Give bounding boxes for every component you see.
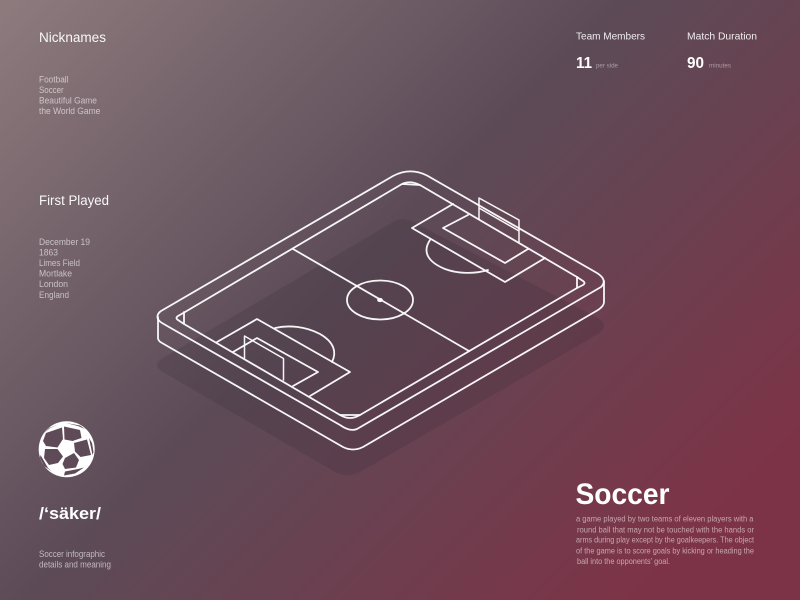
top goal area	[443, 215, 528, 263]
bottom goal area	[233, 338, 318, 386]
first played details: 1863	[39, 248, 58, 258]
stat: team members: per side	[596, 64, 619, 70]
caption: Soccer infographic	[39, 549, 105, 559]
caption	[39, 549, 111, 570]
bottom penalty box	[217, 319, 350, 396]
first played details: London	[39, 279, 68, 289]
stat: match duration: 90	[687, 55, 704, 72]
pitch outer rim	[157, 171, 604, 430]
centre circle	[347, 280, 413, 320]
top goal	[479, 198, 519, 242]
first played details: England	[39, 290, 69, 300]
bottom goal	[244, 336, 284, 380]
stat: match duration: Match Duration	[687, 30, 757, 42]
description: round ball that may not be touched with the hands or	[577, 525, 754, 534]
nicknames heading: Nicknames	[39, 30, 106, 45]
bottom penalty arc	[275, 326, 334, 362]
stat: match duration	[687, 30, 757, 72]
centre spot	[378, 299, 382, 301]
description: arms during play except by the goalkeepers. The object	[576, 536, 755, 545]
first played block	[39, 193, 109, 300]
top penalty box	[412, 204, 545, 282]
pitch shadow	[157, 219, 604, 475]
nicknames list	[39, 74, 100, 116]
description: a game played by two teams of eleven players with a	[576, 515, 754, 524]
stat: team members: 11	[576, 55, 592, 72]
description: ball into the opponents' goal.	[577, 557, 670, 566]
nicknames list: Beautiful Game	[39, 95, 97, 105]
stat: team members: Team Members	[576, 30, 645, 42]
isometric soccer pitch	[157, 171, 604, 450]
nicknames list: Football	[39, 74, 68, 84]
description	[576, 515, 755, 566]
description: of the game is to score goals by kicking or heading the	[576, 546, 755, 555]
nicknames list: Soccer	[39, 85, 64, 95]
corner arcs	[184, 184, 577, 415]
stat: match duration: minutes	[709, 64, 731, 70]
first played heading: First Played	[39, 193, 109, 208]
stat: team members	[576, 30, 645, 72]
field boundary	[176, 182, 584, 418]
halfway line	[293, 249, 469, 351]
phonetic spelling: /‘säker/	[39, 504, 101, 523]
top penalty arc	[426, 240, 488, 273]
first played details	[39, 237, 90, 300]
pitch base edge	[158, 281, 604, 450]
icon: soccer ball	[39, 421, 95, 477]
title: Soccer	[576, 478, 670, 511]
first played details: Limes Field	[39, 258, 80, 268]
nicknames list: the World Game	[39, 106, 100, 116]
first played details: Mortlake	[39, 268, 72, 278]
first played details: December 19	[39, 237, 90, 247]
caption: details and meaning	[39, 560, 111, 570]
nicknames block	[39, 30, 106, 116]
